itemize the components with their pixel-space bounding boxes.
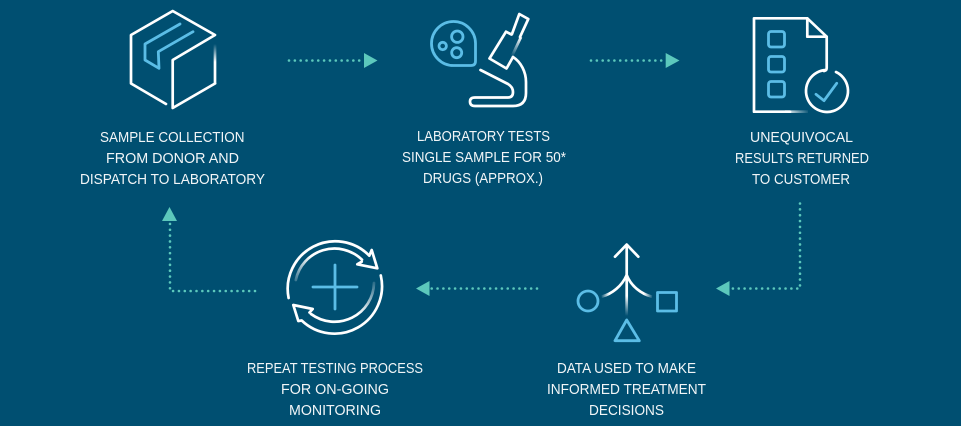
icon: microscope bbox=[470, 14, 528, 106]
label: results: UNEQUIVOCAL bbox=[750, 130, 853, 146]
label: results: RESULTS RETURNED bbox=[735, 151, 869, 167]
arrow: laboratory to results bbox=[591, 53, 680, 68]
label: repeat testing: REPEAT TESTING PROCESS bbox=[247, 361, 423, 377]
icon: repeat cycle with plus bbox=[288, 241, 382, 334]
label: sample collection: DISPATCH TO LABORATORY bbox=[80, 172, 265, 188]
label: treatment decisions: DECISIONS bbox=[589, 403, 664, 419]
label: laboratory tests: SINGLE SAMPLE FOR 50* bbox=[402, 150, 566, 166]
arrow: results to data bbox=[716, 204, 800, 296]
label: repeat testing bbox=[247, 361, 423, 419]
label: laboratory tests: DRUGS (APPROX.) bbox=[423, 171, 543, 187]
label: results bbox=[735, 130, 869, 188]
panel: results bbox=[735, 18, 869, 188]
icon: parcel box bbox=[131, 11, 215, 108]
label: results: TO CUSTOMER bbox=[752, 172, 850, 188]
label: repeat testing: MONITORING bbox=[289, 403, 381, 419]
panel: laboratory tests bbox=[402, 14, 566, 187]
icon: sample drop bbox=[432, 22, 476, 66]
label: sample collection: SAMPLE COLLECTION bbox=[100, 130, 244, 146]
arrow: collection to laboratory bbox=[289, 53, 378, 68]
label: treatment decisions bbox=[547, 361, 706, 419]
icon: results document bbox=[754, 18, 848, 112]
icon: converging arrow and shapes bbox=[578, 245, 676, 341]
arrow: data to repeat testing bbox=[416, 281, 537, 296]
label: treatment decisions: DATA USED TO MAKE bbox=[557, 361, 696, 377]
label: sample collection bbox=[80, 130, 265, 188]
label: laboratory tests: LABORATORY TESTS bbox=[417, 129, 550, 145]
label: treatment decisions: INFORMED TREATMENT bbox=[547, 382, 706, 398]
panel: treatment decisions bbox=[547, 245, 706, 419]
arrow: repeat testing to sample collection bbox=[162, 207, 255, 291]
label: sample collection: FROM DONOR AND bbox=[106, 151, 239, 167]
label: laboratory tests bbox=[402, 129, 566, 187]
panel: sample collection bbox=[80, 11, 265, 188]
panel: repeat testing bbox=[247, 241, 423, 419]
icon: microscope and sample bbox=[432, 14, 528, 106]
label: repeat testing: FOR ON-GOING bbox=[281, 382, 389, 398]
